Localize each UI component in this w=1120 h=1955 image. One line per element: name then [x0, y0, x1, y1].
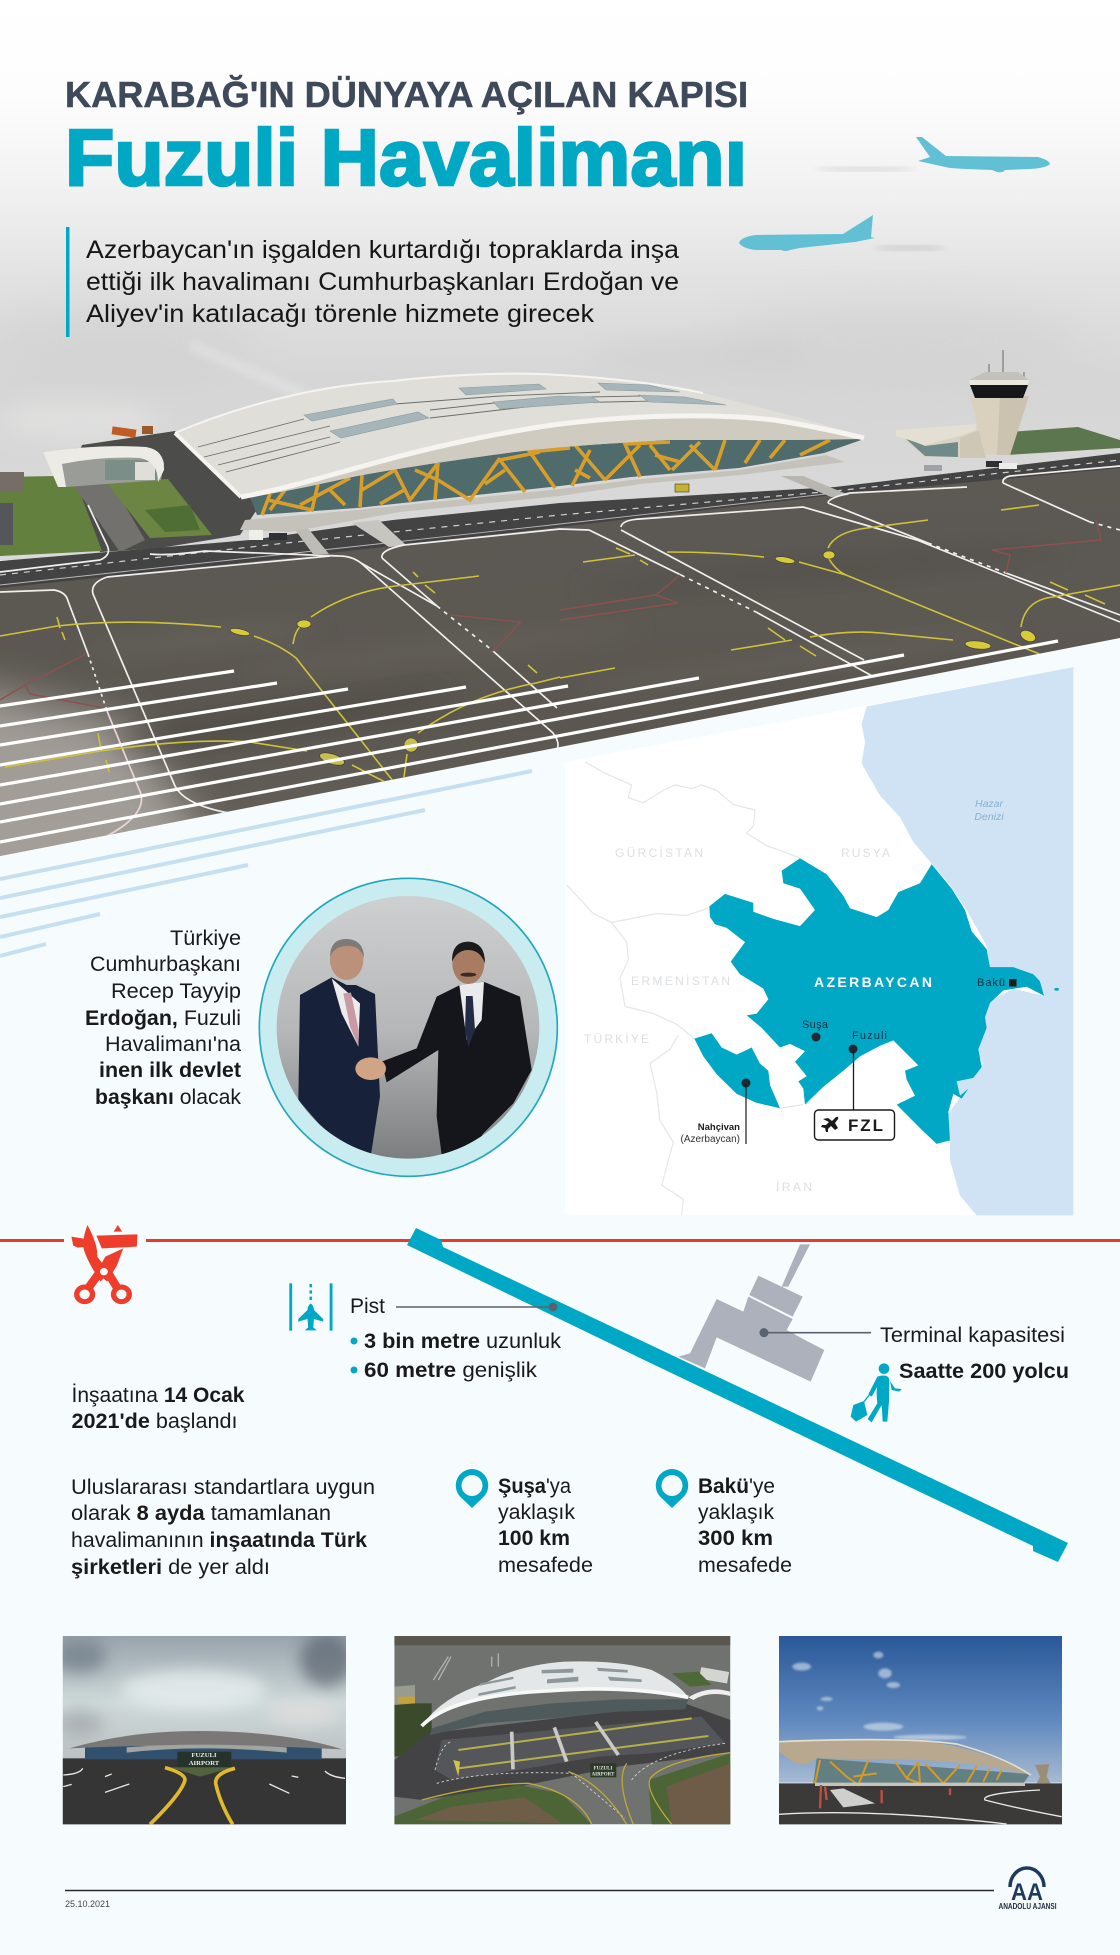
roof lines — [198, 392, 700, 472]
neighbouring country names — [584, 846, 890, 1194]
map labels — [584, 798, 1016, 1194]
neighbouring country names: GÜRCİSTAN — [615, 846, 703, 860]
text: runway: 60 metre genişlik — [364, 1359, 538, 1382]
date: 25.10.2021 — [65, 1899, 110, 1909]
Shusha: Suşa — [802, 1019, 829, 1031]
text: Baku distance: Bakü'ye — [698, 1475, 775, 1498]
photo: aerial view of terminal and car park — [394, 1636, 730, 1824]
control tower — [969, 350, 1029, 455]
small islands — [1054, 988, 1059, 991]
parked cars — [249, 461, 1017, 540]
neighbouring country names: İRAN — [776, 1180, 812, 1194]
Nakhchivan label with pointer: (Azerbaycan) — [681, 1134, 740, 1145]
text: leaders caption: Havalimanı'na — [105, 1032, 241, 1056]
icon: pin Baku — [656, 1469, 688, 1508]
text: leaders caption — [85, 926, 241, 1109]
text: construction detail: şirketleri de yer aldı — [71, 1556, 270, 1579]
text: Baku distance: 300 km — [698, 1527, 773, 1550]
map — [567, 667, 1073, 1215]
title line one: KARABAĞ'IN DÜNYAYA AÇILAN KAPISI — [65, 74, 748, 115]
small entrance canopy — [43, 446, 164, 487]
text: construction detail — [71, 1476, 375, 1579]
text: construction detail: havalimanının inşaatında Türk — [71, 1529, 367, 1552]
icon: pin Shusha — [456, 1469, 488, 1508]
text: leaders caption: Cumhurbaşkanı — [90, 952, 241, 976]
intro text: Aliyev'in katılacağı törenle hizmete girecek — [86, 300, 595, 328]
icon: scissors and ribbon — [71, 1225, 137, 1302]
Fuzuli with pointer — [848, 1030, 887, 1110]
logo: Anadolu Ajansı: ANADOLU AJANSI — [998, 1902, 1056, 1911]
sea name: Denizi — [974, 811, 1004, 823]
text: Shusha distance: 100 km — [498, 1527, 570, 1550]
neighbouring country names: ERMENİSTAN — [631, 974, 730, 988]
footer rule — [65, 1890, 994, 1892]
text: runway: Pist — [350, 1295, 385, 1318]
neighbouring country names: RUSYA — [841, 846, 890, 860]
intro accent bar — [66, 227, 70, 337]
text: Shusha distance — [498, 1475, 593, 1577]
sea name: Hazar — [975, 798, 1004, 810]
text: construction start: İnşaatına 14 Ocak — [72, 1384, 245, 1407]
text: Shusha distance: yaklaşık — [498, 1501, 576, 1524]
photo: terminal front with Fuzuli Airport sign — [53, 1633, 353, 1825]
photo: terminal front with Fuzuli Airport sign: AIRPORT — [189, 1760, 220, 1767]
neighbouring borders — [567, 762, 803, 1215]
logo: Anadolu Ajansı — [998, 1868, 1056, 1911]
text: runway: 3 bin metre uzunluk — [364, 1330, 562, 1353]
roof edge highlights — [175, 374, 864, 497]
terminal facade fascia — [264, 418, 854, 495]
text: leaders caption: Recep Tayyip — [111, 979, 241, 1003]
text: leaders caption: başkanı olacak — [95, 1085, 241, 1109]
apron — [0, 468, 1120, 856]
clasped hands — [355, 1057, 386, 1080]
text: terminal capacity — [880, 1324, 1069, 1383]
red taxiway markings — [0, 520, 1101, 708]
photo: terminal under blue sky — [779, 1636, 1062, 1825]
title line two: Fuzuli Havalimanı — [65, 113, 747, 202]
Nakhchivan label with pointer — [681, 1078, 750, 1145]
runway — [407, 1228, 1068, 1562]
decorative pale blue stripes — [0, 771, 532, 956]
terminal forecourt — [240, 455, 845, 532]
text: Shusha distance: Şuşa'ya — [498, 1475, 571, 1498]
intro text: Azerbaycan'ın işgalden kurtardığı topraklarda inşa — [86, 236, 679, 264]
low building beside the tower — [896, 424, 986, 458]
map background land — [565, 667, 1073, 1215]
neighbouring country names: TÜRKİYE — [584, 1032, 649, 1046]
country name: AZERBAYCAN — [814, 974, 932, 990]
photo: terminal front with Fuzuli Airport sign: FUZULI — [191, 1752, 217, 1759]
logo: Anadolu Ajansı: AA — [1011, 1879, 1043, 1906]
right figure — [382, 942, 532, 1155]
icon: traveller with suitcase — [851, 1363, 902, 1422]
Fuzuli with pointer: Fuzuli — [852, 1030, 887, 1042]
pointer to runway — [396, 1302, 558, 1312]
Azerbaijan — [709, 858, 1044, 1144]
text: leaders caption: inen ilk devlet — [99, 1058, 241, 1082]
yellow taxiway guidance lines — [0, 505, 1120, 782]
Nakhchivan — [694, 1033, 780, 1108]
terminal plan — [678, 1244, 871, 1382]
text: Baku distance: yaklaşık — [698, 1501, 774, 1524]
photo: aerial view of terminal and car park: AIRPORT — [592, 1773, 615, 1778]
icon: runway with plane — [289, 1283, 332, 1331]
icon: lower plane — [739, 215, 946, 251]
airport code sign: FZL — [848, 1116, 883, 1135]
green fields and paved yards — [0, 427, 1120, 556]
text: construction start: 2021'de başlandı — [72, 1410, 238, 1433]
text: runway — [350, 1295, 562, 1382]
left figure — [298, 939, 380, 1157]
portrait circle: Erdoğan and Aliyev — [259, 878, 557, 1176]
text: construction detail: Uluslararası standartlara uygun — [71, 1476, 375, 1499]
apron weathering — [0, 535, 1060, 920]
text: Baku distance — [698, 1475, 792, 1577]
Caspian Sea — [862, 667, 1073, 1215]
sea name — [974, 798, 1004, 823]
text: construction detail: olarak 8 ayda tamamlanan — [71, 1502, 331, 1525]
text: terminal capacity: Terminal kapasitesi — [880, 1324, 1065, 1347]
pointer to terminal — [759, 1328, 871, 1337]
yellow aircraft stand marks — [230, 484, 1037, 768]
white taxiway markings — [0, 466, 1120, 836]
terminal glass facade — [250, 439, 864, 515]
text: Baku distance: mesafede — [698, 1554, 792, 1577]
text: leaders caption: Türkiye — [170, 926, 241, 950]
road with dashes — [0, 453, 1120, 588]
photo: aerial view of terminal and car park: FUZULI — [594, 1767, 612, 1772]
terminal roof — [175, 374, 864, 497]
intro text — [86, 236, 679, 328]
Shusha — [802, 1019, 829, 1042]
intro text: ettiği ilk havalimanı Cumhurbaşkanları Erdoğan ve — [86, 268, 679, 296]
Baku: Bakü — [977, 977, 1005, 989]
text: Shusha distance: mesafede — [498, 1554, 593, 1577]
construction vehicles — [112, 426, 153, 438]
red divider line — [0, 1239, 1120, 1242]
roof skylights — [304, 383, 726, 438]
aerial photo of the airport — [0, 0, 1120, 920]
Nakhchivan label with pointer: Nahçivan — [698, 1122, 740, 1133]
hazy landscape — [0, 0, 1120, 560]
text: construction start — [72, 1384, 245, 1433]
orange tree columns — [262, 440, 830, 515]
text: leaders caption: Erdoğan, Fuzuli — [85, 1006, 241, 1030]
white painted runway stripes — [0, 641, 1058, 842]
icon: upper plane — [815, 137, 1050, 172]
text: terminal capacity: Saatte 200 yolcu — [899, 1360, 1069, 1383]
airport code sign — [814, 1110, 894, 1140]
